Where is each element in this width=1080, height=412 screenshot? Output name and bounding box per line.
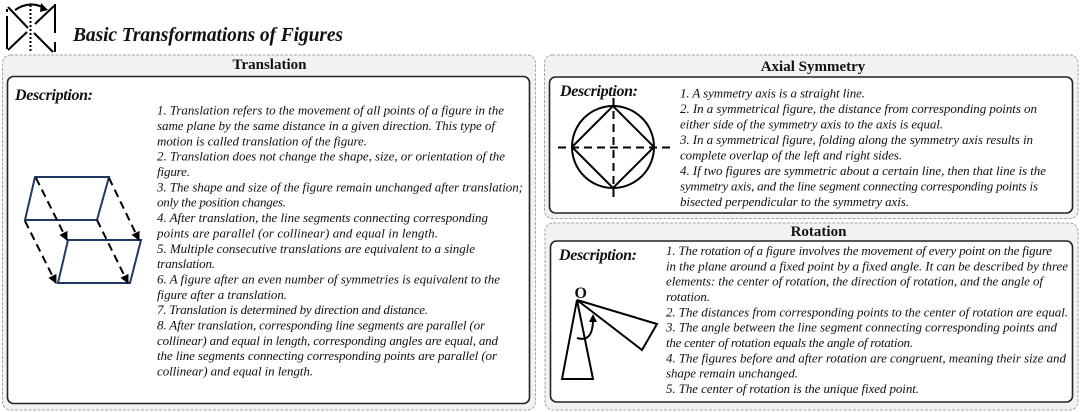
text: translation rules: only the position changes. bbox=[157, 195, 286, 210]
text: translation rules: collinear) and equal in length. bbox=[157, 364, 313, 379]
text: translation rules: motion is called translation of the figure. bbox=[157, 133, 367, 148]
text: translation rules bbox=[156, 103, 523, 379]
text: axial symmetry rules: 1. A symmetry axis is a straight line. bbox=[680, 85, 865, 100]
text: rotation rules: 1. The rotation of a figure involves the movement of every point on the figure bbox=[666, 243, 1052, 258]
text: axial symmetry rules bbox=[679, 85, 1046, 209]
text: rotation rules bbox=[665, 243, 1068, 396]
text: translation rules: figure after a translation. bbox=[157, 287, 287, 302]
panel: rotation bbox=[545, 223, 1078, 410]
panel: axial symmetry bbox=[544, 55, 1078, 218]
diagram: rotated triangle bbox=[562, 285, 657, 379]
text: axial symmetry rules: 4. If two figures are symmetric about a certain line, then that line is the bbox=[680, 163, 1046, 178]
text: translation rules: same plane by the same distance in a given direction. This type of bbox=[157, 118, 497, 133]
text: rotation rules: 2. The distances from corresponding points to the center of rotation are equal. bbox=[666, 304, 1068, 319]
text: translation rules: 5. Multiple consecutive translations are equivalent to a single bbox=[157, 241, 475, 256]
text: rotation rules: in the plane around a fixed point by a fixed angle. It can be described by three bbox=[666, 258, 1068, 273]
heading: translation: Translation bbox=[233, 57, 307, 73]
text: axial symmetry rules: symmetry axis, and the line segment connecting corresponding points is bbox=[680, 178, 1038, 194]
icon: transformations logo bbox=[7, 3, 55, 53]
text: translation rules: the line segments connecting corresponding points are parallel (or bbox=[157, 348, 498, 363]
text: axial symmetry rules: either side of the symmetry axis to the axis is equal. bbox=[680, 116, 943, 131]
diagram: translated parallelograms bbox=[25, 177, 141, 283]
text: axial symmetry rules: bisected perpendicular to the symmetry axis. bbox=[680, 194, 909, 209]
label: axial description: Description: bbox=[559, 83, 638, 100]
text: axial symmetry rules: 2. In a symmetrical figure, the distance from corresponding points on bbox=[680, 101, 1037, 116]
text: axial symmetry rules: 3. In a symmetrical figure, folding along the symmetry axis results in bbox=[679, 132, 1033, 147]
text: translation rules: 1. Translation refers to the movement of all points of a figure in the bbox=[157, 103, 504, 118]
heading: rotation: Rotation bbox=[791, 224, 847, 240]
text: translation rules: 3. The shape and size of the figure remain unchanged after translation; bbox=[156, 179, 523, 194]
text: translation rules: 4. After translation, the line segments connecting corresponding bbox=[157, 210, 488, 225]
text: translation rules: figure. bbox=[157, 164, 190, 179]
text: rotation rules: 4. The figures before and after rotation are congruent, meaning their size and bbox=[666, 350, 1066, 365]
text: rotation rules: the center of rotation equals the angle of rotation. bbox=[666, 335, 913, 350]
title: Basic Transformations of Figures bbox=[72, 25, 343, 46]
label: translation description: Description: bbox=[14, 87, 93, 104]
text: rotation rules: 5. The center of rotation is the unique fixed point. bbox=[666, 381, 919, 396]
text: translation rules: 7. Translation is determined by direction and distance. bbox=[157, 302, 428, 317]
heading: axial symmetry: Axial Symmetry bbox=[761, 59, 866, 75]
text: translation rules: 2. Translation does not change the shape, size, or orientation of the bbox=[157, 149, 505, 164]
text: translation rules: 8. After translation, corresponding line segments are parallel (or bbox=[157, 318, 486, 332]
text: translation rules: translation. bbox=[157, 256, 215, 271]
text: axial symmetry rules: complete overlap of the left and right sides. bbox=[680, 147, 902, 162]
text: rotation rules: elements: the center of rotation, the direction of rotation, and the angle of bbox=[666, 274, 1045, 289]
diagram: circle and diamond with axes bbox=[558, 98, 670, 200]
text: translation rules: points are parallel (or collinear) and equal in length. bbox=[156, 225, 438, 240]
text: translation rules: 6. A figure after an even number of symmetries is equivalent to the bbox=[157, 272, 500, 286]
label: rotation centre O: O bbox=[574, 285, 587, 302]
label: rotation description: Description: bbox=[558, 247, 637, 264]
text: rotation rules: shape remain unchanged. bbox=[666, 366, 798, 381]
panel: translation bbox=[2, 55, 536, 410]
text: rotation rules: 3. The angle between the line segment connecting corresponding points and bbox=[665, 320, 1058, 335]
text: translation rules: collinear) and equal in length, corresponding angles are equal, and bbox=[157, 333, 498, 348]
text: rotation rules: rotation. bbox=[666, 289, 710, 304]
